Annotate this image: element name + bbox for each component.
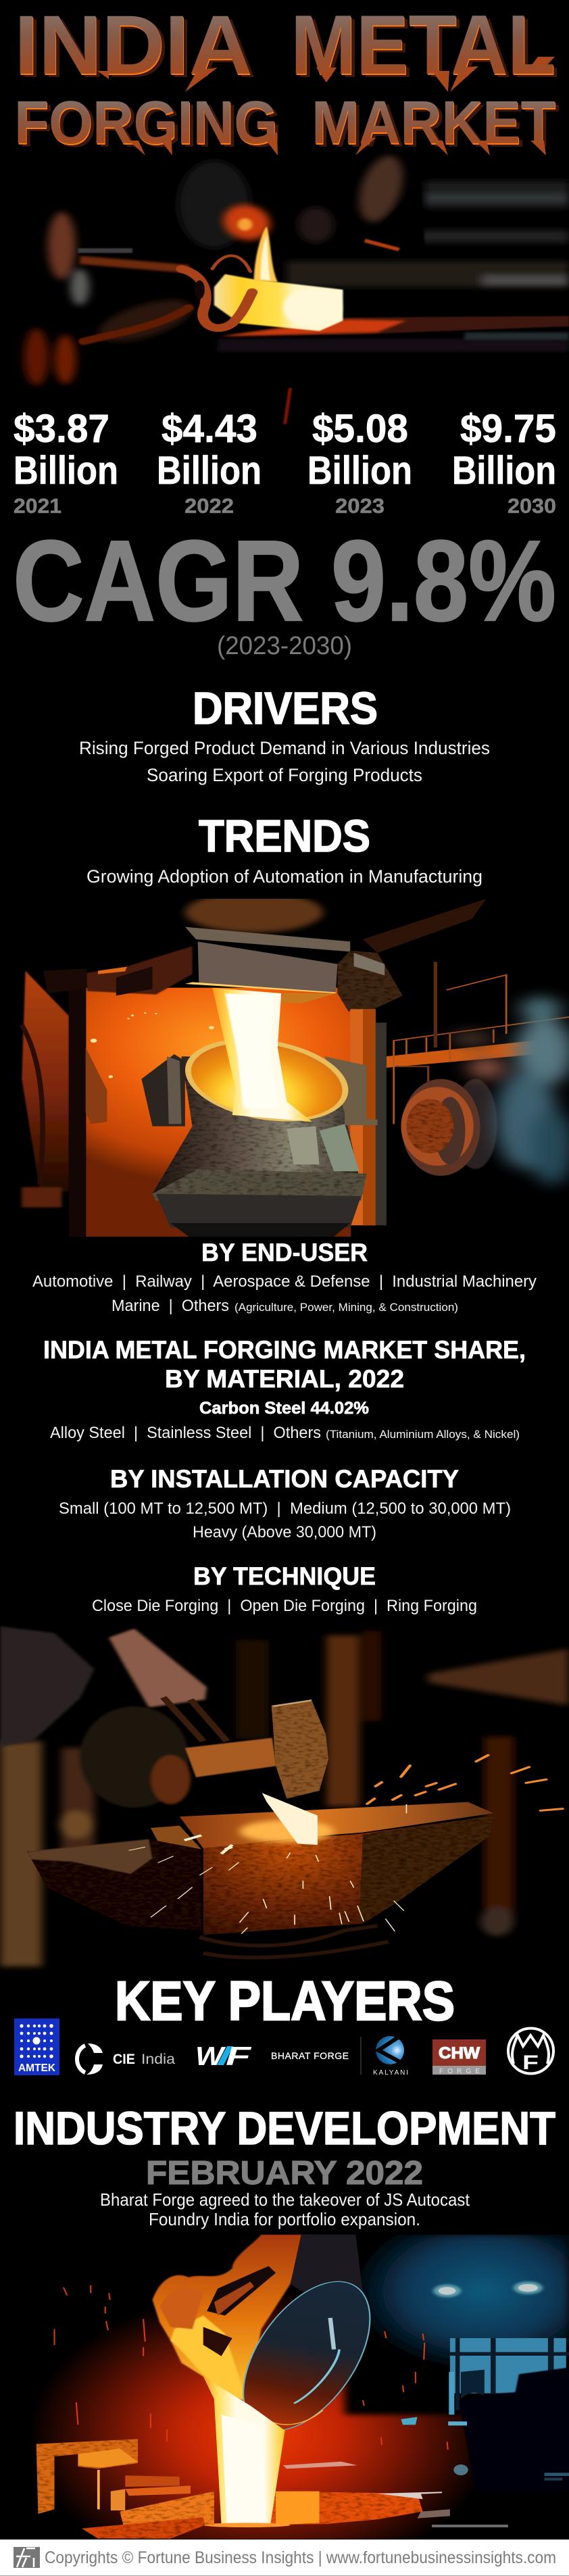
by end-user: Marine | Others — [112, 1297, 229, 1315]
stat: 2021 — [14, 407, 118, 518]
title: India Metal Forging Market: MARKET — [312, 89, 555, 157]
footer bar — [0, 2540, 569, 2576]
industry development: Foundry India for portfolio expansion. — [149, 2209, 420, 2229]
trends: TRENDS — [199, 811, 370, 862]
drivers: Rising Forged Product Demand in Various Industries — [79, 738, 490, 758]
logo: WF: F — [226, 2042, 252, 2071]
by installation capacity — [59, 1465, 511, 1541]
photo: hammer striking hot metal on an anvil — [0, 1627, 569, 1966]
stat: 2021: 2021 — [14, 494, 61, 518]
title: India Metal Forging Market: INDIA — [14, 0, 252, 92]
title: India Metal Forging Market: FORGING — [18, 93, 282, 160]
by installation capacity: BY INSTALLATION CAPACITY — [110, 1465, 459, 1493]
trends — [86, 811, 483, 887]
market share by material: Carbon Steel 44.02% — [199, 1399, 369, 1418]
stat: 2023: 2023 — [335, 494, 385, 518]
industry development: Bharat Forge agreed to the takeover of JS Autocast — [100, 2189, 470, 2210]
logo: CHW Forge — [432, 2039, 486, 2075]
stat: 2030: 2030 — [508, 494, 556, 518]
stat: 2023 — [307, 407, 412, 518]
by technique: Close Die Forging | Open Die Forging | Ring Forging — [92, 1597, 477, 1615]
market size statistics — [14, 407, 556, 518]
drivers: DRIVERS — [193, 683, 378, 734]
title: India Metal Forging Market: INDIA — [18, 2, 256, 95]
stat: 2021: $3.87 — [14, 407, 109, 451]
logo: Amtek — [14, 2018, 59, 2075]
by technique — [92, 1562, 477, 1615]
logo: CIE India: CIE — [113, 2052, 135, 2067]
market share by material: (Titanium, Aluminium Alloys, & Nickel) — [326, 1428, 520, 1441]
by end-user: BY END-USER — [201, 1239, 368, 1266]
stat: 2022: $4.43 — [162, 407, 257, 451]
stat: 2021: Billion — [14, 449, 118, 493]
stat: 2023: $5.08 — [312, 407, 408, 451]
logo: CIE India: India — [141, 2052, 175, 2067]
trends: Growing Adoption of Automation in Manufacturing — [86, 866, 483, 887]
stat: 2023: Billion — [307, 449, 412, 493]
market share by material: INDIA METAL FORGING MARKET SHARE, — [43, 1336, 526, 1364]
market share by material: Alloy Steel | Stainless Steel | Others — [50, 1424, 321, 1442]
photo: molten steel pouring into a furnace ladle — [22, 892, 569, 1237]
by end-user: (Agriculture, Power, Mining, & Construction) — [234, 1301, 458, 1314]
industry development — [14, 2102, 555, 2229]
logo: CIE India — [77, 2044, 175, 2075]
stat: 2030: $9.75 — [460, 407, 556, 451]
logo: CHW Forge: CHW — [439, 2044, 480, 2062]
by end-user — [32, 1239, 537, 1315]
industry development: FEBRUARY 2022 — [146, 2155, 423, 2191]
logo: Amtek: AMTEK — [18, 2062, 55, 2074]
key player logos — [14, 2018, 553, 2077]
key players heading: KEY PLAYERS — [115, 1971, 455, 2032]
CAGR figure: (2023-2030) — [217, 632, 352, 660]
by end-user: Automotive | Railway | Aerospace & Defense | Industrial Machinery — [32, 1272, 537, 1291]
logo: MMF: F — [522, 2052, 539, 2074]
logo: MMF — [508, 2029, 553, 2074]
title: India Metal Forging Market: METAL — [291, 0, 556, 93]
stat: 2022 — [157, 407, 262, 518]
logo: WF — [195, 2042, 252, 2071]
drivers: Soaring Export of Forging Products — [147, 765, 422, 785]
stat: 2030 — [452, 407, 556, 518]
logo: Kalyani: KALYANI — [373, 2069, 408, 2077]
market share by material: BY MATERIAL, 2022 — [165, 1365, 404, 1393]
by installation capacity: Small (100 MT to 12,500 MT) | Medium (12,500 to 30,000 MT) — [59, 1500, 511, 1518]
icon: Fortune Business Insights logo — [14, 2547, 40, 2568]
drivers — [79, 683, 490, 785]
photo: molten metal poured from a ladle — [26, 2235, 569, 2540]
logo: CHW Forge: FORGE — [439, 2068, 480, 2075]
title: India Metal Forging Market: FORGING — [14, 89, 278, 157]
photo: hot metal held in tongs on an anvil — [24, 153, 569, 424]
title: India Metal Forging Market: METAL — [291, 0, 555, 92]
by technique: BY TECHNIQUE — [193, 1562, 376, 1590]
stat: 2030: Billion — [452, 449, 556, 493]
stat: 2022: Billion — [157, 449, 262, 493]
title: India Metal Forging Market — [14, 0, 560, 160]
logo: Kalyani — [361, 2036, 408, 2077]
stat: 2022: 2022 — [184, 494, 234, 518]
title: India Metal Forging Market: FORGING — [15, 91, 278, 158]
title: India Metal Forging Market: INDIA — [15, 0, 253, 93]
title: India Metal Forging Market: METAL — [295, 2, 560, 95]
logo: WF: W — [195, 2042, 226, 2071]
title: India Metal Forging Market: MARKET — [312, 91, 556, 158]
by installation capacity: Heavy (Above 30,000 MT) — [193, 1523, 376, 1541]
market share by material — [43, 1336, 526, 1442]
logo: Bharat Forge: BHARAT FORGE — [271, 2050, 349, 2061]
title: India Metal Forging Market: MARKET — [316, 93, 560, 160]
